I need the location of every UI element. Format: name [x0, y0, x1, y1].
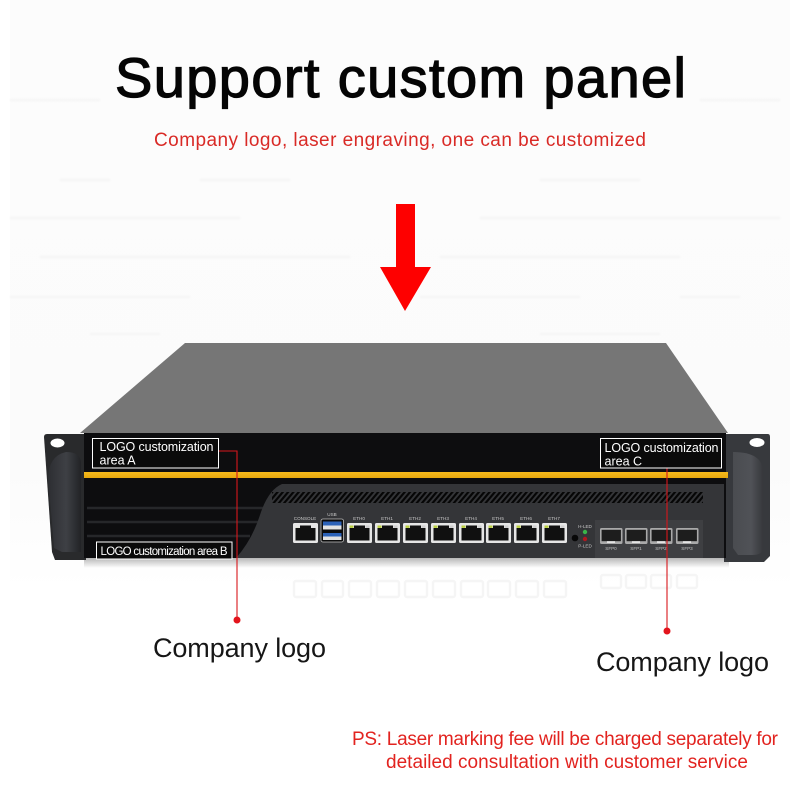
SFP module plate	[595, 520, 703, 558]
left rack ear	[44, 434, 86, 560]
port reflection	[294, 575, 697, 597]
USB ports	[321, 519, 344, 542]
SFP module plate: SFP2	[655, 546, 667, 551]
logo area A label: area A	[100, 454, 136, 468]
logo area B label: LOGO customization area B	[100, 546, 228, 558]
port labels: ETH7	[548, 516, 560, 521]
PS note: PS: Laser marking fee will be charged separately for	[352, 729, 779, 750]
port labels: ETH6	[520, 516, 532, 521]
ethernet ports	[347, 523, 567, 543]
port labels: ETH4	[465, 516, 477, 521]
PS note	[352, 729, 779, 773]
left handle	[48, 452, 81, 552]
top cover	[80, 343, 728, 433]
port labels: ETH2	[409, 516, 421, 521]
logo area A label: LOGO customization	[100, 440, 214, 454]
SFP module plate: SFP3	[681, 546, 693, 551]
logo area A label	[92, 438, 218, 468]
port labels	[294, 512, 593, 548]
status LEDs and reset button	[572, 530, 587, 541]
logo area B label	[96, 542, 232, 559]
front panel	[84, 433, 726, 558]
SFP module plate: SFP0	[605, 546, 617, 551]
port labels: USB	[327, 512, 337, 517]
grey port plate	[236, 484, 724, 558]
left vent ridges	[87, 508, 270, 536]
port labels: ETH0	[353, 516, 365, 521]
company logo label left: Company logo	[153, 633, 326, 663]
company logo label right: Company logo	[596, 647, 769, 677]
logo area C label	[600, 438, 722, 468]
port labels: ETH3	[437, 516, 449, 521]
PS note: detailed consultation with customer service	[386, 752, 748, 773]
port labels: ETH5	[492, 516, 504, 521]
logo area C label: area C	[604, 454, 642, 468]
hatch vents	[272, 492, 703, 503]
port labels: P-LED	[578, 544, 592, 548]
port labels: CONSOLE	[294, 516, 316, 521]
device: rack-mount network appliance	[44, 343, 770, 597]
logo area C label: LOGO customization	[604, 441, 719, 455]
callout lines: right company logo	[664, 468, 670, 634]
SFP module plate: SFP1	[630, 546, 642, 551]
port labels: H-LED	[578, 524, 593, 529]
right rack ear	[724, 434, 770, 562]
arrow pointing down to the device	[380, 204, 431, 311]
port labels: ETH1	[381, 516, 393, 521]
background: white brick wall	[10, 0, 790, 590]
callout lines: left company logo	[219, 451, 240, 624]
title: Support custom panel	[115, 46, 686, 109]
console port	[293, 523, 318, 543]
yellow stripe	[84, 472, 728, 478]
subtitle: Company logo, laser engraving, one can be customized	[154, 130, 646, 151]
device shadow	[84, 558, 729, 568]
right handle	[733, 452, 763, 555]
